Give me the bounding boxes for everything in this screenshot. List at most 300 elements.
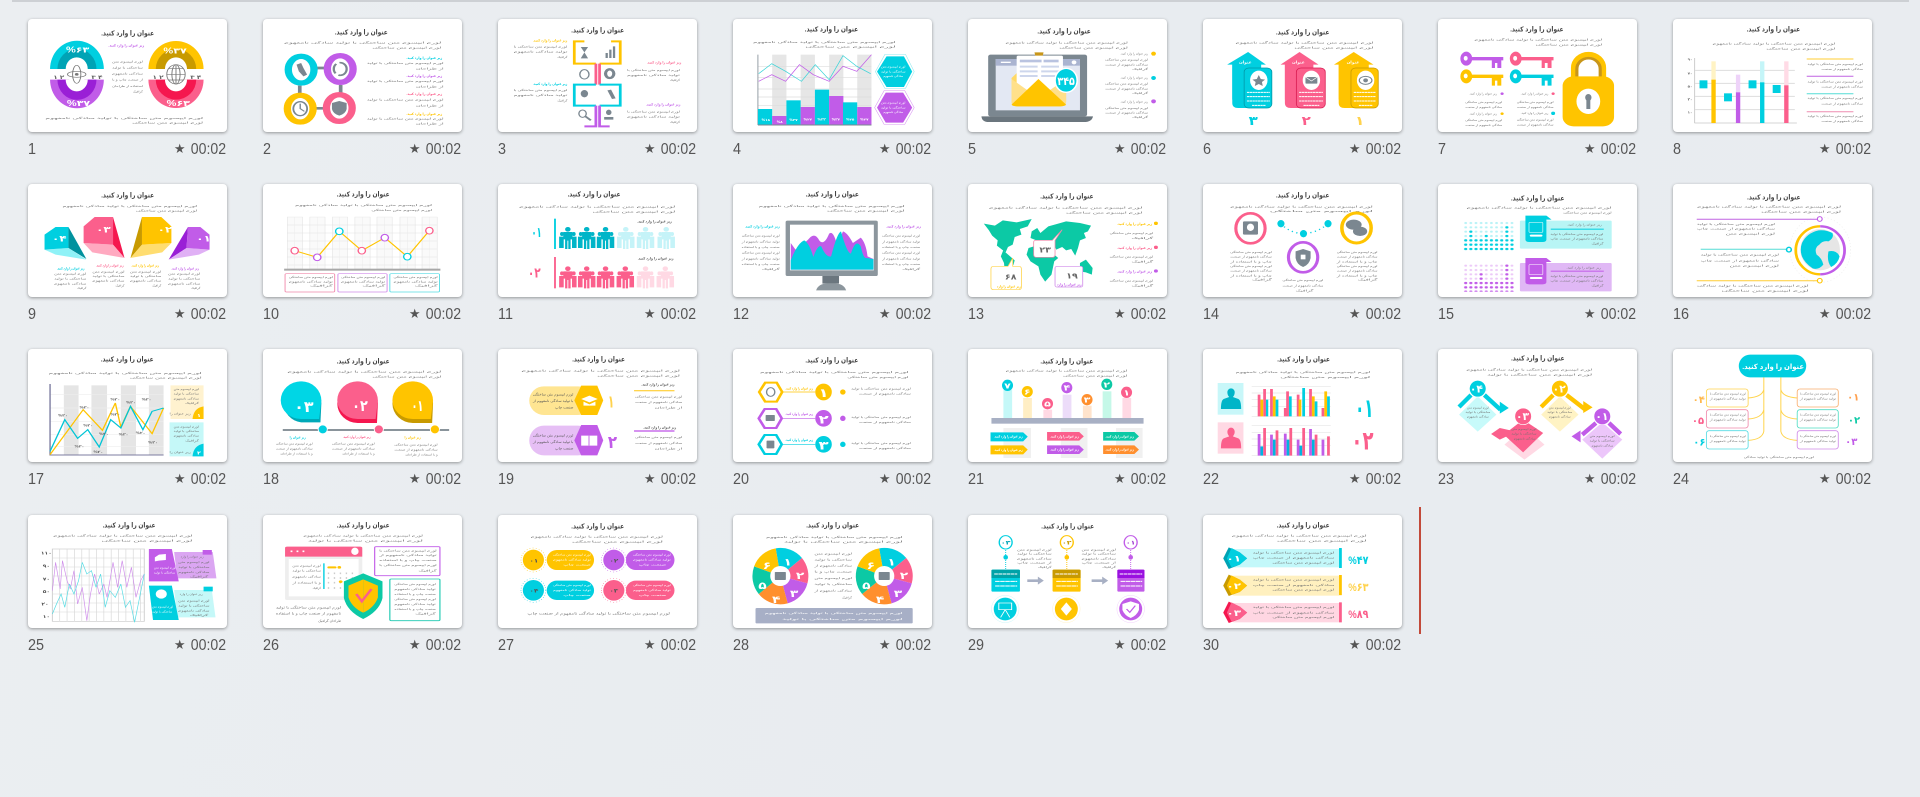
captions: لورم ایپسوم متن ساختگی xyxy=(394,443,437,447)
bottom text: لورم ایپسوم متن ساختگی با تولید سادگی نامفهوم xyxy=(45,117,203,121)
duration: 00:02 xyxy=(1836,306,1872,323)
cut gem shapes: ۰۱ xyxy=(196,235,210,244)
left text block: تولید سادگی نامفهوم از xyxy=(740,257,779,261)
slide 8 preview xyxy=(1672,19,1872,132)
slide 7 preview xyxy=(1438,19,1636,132)
row 2: زیر عنوان را وارد کنید. xyxy=(785,412,813,416)
row 2: ۲ xyxy=(818,414,828,427)
bottom text: طراحان گرافیک xyxy=(318,618,341,623)
left boxes: لورم ایپسوم متن ساختگی با xyxy=(1709,413,1746,418)
left donut chart: ۴ ۳ xyxy=(91,75,102,81)
right column text: چاپ و با استفاده از xyxy=(1334,260,1377,264)
title: عنوان را وارد کنید. xyxy=(805,356,858,365)
duration: 00:02 xyxy=(1131,637,1166,654)
purple note xyxy=(148,549,216,581)
tree connectors xyxy=(1748,378,1797,441)
slide number: 6 xyxy=(1202,141,1211,158)
cyan leader and text: سادگی نامفهوم از صنعت چاپ xyxy=(1700,259,1780,264)
bullet list: سادگی نامفهوم از صنعت xyxy=(1105,87,1148,92)
cyan leader and text: لورم ایپسوم متن xyxy=(1729,264,1779,269)
star icon: ★ xyxy=(1114,142,1126,157)
cut gem shapes: ۰۴ xyxy=(51,235,66,244)
right text list: زیر عنوان را وارد کنید. xyxy=(406,56,442,60)
intro text: لورم ایپسوم متن ساختگی با تولید سادگی نامفهوم xyxy=(988,206,1142,211)
star icon: ★ xyxy=(174,472,186,487)
left text block: زیر عنوان را وارد کنید. xyxy=(744,225,779,229)
left donut chart: ۲ ۱ xyxy=(53,75,64,81)
bullet list: گرافیک xyxy=(1132,92,1149,95)
intro text: لورم ایپسوم متن ساختگی با تولید سادگی نامفهوم xyxy=(303,534,422,538)
row 03: ۰۳ xyxy=(1226,609,1241,618)
intro text: لورم ایپسوم متن ساختگی با تولید سادگی نامفهوم xyxy=(760,371,908,375)
intro text xyxy=(303,534,422,543)
right text blocks: تولید سادگی نامفهوم xyxy=(627,74,680,78)
title: عنوان را وارد کنید. xyxy=(1276,521,1329,530)
slide 9 thumbnail xyxy=(26,183,229,323)
number 02: ۰۲ xyxy=(1351,426,1373,455)
slide number: 16 xyxy=(1672,306,1689,323)
centre text: ساختگی با تولید xyxy=(814,582,852,586)
legend list: لورم ایپسوم متن ساختگی xyxy=(1109,232,1153,236)
right boxes: تولید سادگی نامفهوم از xyxy=(1798,439,1836,444)
intro text xyxy=(1235,41,1373,51)
intro text: لورم ایپسوم متن ساختگی با تولید سادگی نامفهوم xyxy=(753,41,895,45)
intro text xyxy=(521,369,680,379)
line chart: %۳۰ xyxy=(83,424,93,428)
centre text: لورم ایپسوم متن xyxy=(814,576,852,580)
slide number: 10 xyxy=(262,306,279,323)
left segmented wheel: ۶ xyxy=(762,560,771,571)
key legends: لورم ایپسوم متن ساختگی xyxy=(1516,101,1553,105)
key legends: سادگی نامفهوم از صنعت xyxy=(1516,106,1554,110)
right segmented wheel xyxy=(855,548,912,605)
timeline xyxy=(282,425,449,434)
centre text: گرافیک xyxy=(841,596,852,599)
intro text: لورم ایپسوم متن ساختگی با تولید سادگی نامفهوم xyxy=(1235,41,1373,46)
line chart: %۳۰ xyxy=(79,405,89,409)
duration: 00:02 xyxy=(661,471,696,488)
slide 6 preview xyxy=(1202,19,1402,132)
cyan hexagon note: ساختگی با تولید xyxy=(880,70,906,74)
pillar chart: ۶ xyxy=(1023,388,1030,397)
captions: و با استفاده از طراحان xyxy=(280,452,313,456)
title pill: عنوان را وارد کنید. xyxy=(1742,362,1804,371)
slide 18 preview xyxy=(262,349,462,462)
yellow arrow card: ۱ xyxy=(1355,113,1364,128)
right text blocks xyxy=(634,383,682,451)
right text block: صنعت چاپ و با استفاده xyxy=(882,246,920,249)
people row 02 xyxy=(527,257,674,289)
right column text: گرافیک xyxy=(1357,278,1378,282)
duration: 00:02 xyxy=(191,637,226,654)
yellow pill with hexagon: لورم ایپسوم متن ساختگی xyxy=(532,392,573,396)
centre text: سادگی نامفهوم از xyxy=(812,589,852,593)
cyan note: ساختگی با تولید xyxy=(173,430,199,433)
centre text: لورم ایپسوم متن xyxy=(814,552,852,556)
row 1 xyxy=(759,383,911,402)
purple info panel: لورم ایپسوم متن ساختگی با تولید xyxy=(1550,275,1603,279)
slide number: 7 xyxy=(1438,141,1446,158)
slide 29 preview xyxy=(968,515,1166,628)
purple leader and text: لورم ایپسوم متن xyxy=(1725,232,1775,237)
captions: سادگی نامفهوم از صنعت xyxy=(331,447,375,452)
captions: سادگی نامفهوم xyxy=(54,282,86,287)
slide 25 thumbnail xyxy=(26,514,229,654)
intro text: لورم ایپسوم متن ساختگی با تولید سادگی نامفهوم xyxy=(1231,534,1366,538)
right text blocks xyxy=(627,61,681,124)
right text blocks: لورم ایپسوم متن ساختگی xyxy=(634,436,682,440)
wave chart: ۵۰ xyxy=(42,589,50,594)
teal text box: تولید سادگی نامفهوم xyxy=(394,587,435,591)
right segmented wheel: ۴ xyxy=(875,594,884,605)
slide 25 preview xyxy=(28,515,226,628)
row 02 xyxy=(1223,574,1368,596)
people row 02: ۰۲ xyxy=(527,265,541,281)
line chart: %۳۰ xyxy=(126,400,135,404)
intro text: لورم ایپسوم متن ساختگی با تولید سادگی نامفهوم xyxy=(1466,368,1592,373)
step 04 cyan xyxy=(1459,381,1508,432)
purple note: گرافیک xyxy=(189,575,209,578)
duration: 00:02 xyxy=(191,306,226,323)
side texts: سادگی نامفهوم xyxy=(1081,557,1116,561)
purple dot matrix xyxy=(1463,264,1514,292)
legend list: گرافیک xyxy=(1131,260,1154,264)
slide 13 thumbnail xyxy=(966,183,1169,323)
row 2: لورم ایپسوم متن ساختگی با تولید xyxy=(851,416,910,420)
left text blocks: گرافیک xyxy=(557,99,567,102)
people row 01: ۰۱ xyxy=(531,225,541,241)
column chart: ۹۰ xyxy=(1687,58,1692,62)
right text block: لورم ایپسوم متن ساختگی xyxy=(882,234,920,239)
title: عنوان را وارد کنید. xyxy=(1511,355,1564,363)
row 3 xyxy=(758,435,911,454)
slide number: 1 xyxy=(28,141,36,158)
cyan leader and text xyxy=(1700,248,1791,269)
key legends: لورم ایپسوم متن ساختگی xyxy=(1465,119,1502,123)
captions: زیر عنوان را وارد کنید. xyxy=(56,266,84,270)
intro text: لورم ایپسوم متن ساختگی با تولید سادگی نامفهوم xyxy=(53,534,192,538)
purple note: لورم ایپسوم متن xyxy=(178,560,209,564)
slide 16 preview xyxy=(1672,184,1872,297)
left column text: چاپ و با استفاده از xyxy=(1228,260,1272,264)
slide 17 preview xyxy=(28,349,226,462)
centre text: ساختگی با تولید xyxy=(814,558,852,561)
right segmented wheel: ۲ xyxy=(899,570,908,581)
intro text xyxy=(1712,42,1835,51)
cut gem shapes: ۰۲ xyxy=(157,226,172,235)
slide number: 21 xyxy=(968,471,984,488)
yellow leader and text: لورم ایپسوم متن ساختگی xyxy=(1721,289,1808,294)
intro text: لورم ایپسوم متن ساختگی xyxy=(1766,47,1835,51)
cyan arrow card xyxy=(1227,52,1271,128)
purple info panel: زیر عنوان را وارد کنید. xyxy=(1566,266,1601,270)
intro text: لورم ایپسوم متن ساختگی با تولید سادگی نامفهوم xyxy=(287,370,441,375)
slide 30 thumbnail xyxy=(1201,514,1404,654)
title pill xyxy=(1738,355,1806,378)
right text list: لورم ایپسوم متن ساختگی با تولید xyxy=(366,98,443,103)
duration: 00:02 xyxy=(896,471,932,488)
left column text: سادگی نامفهوم از صنعت xyxy=(1230,255,1272,260)
slide number: 28 xyxy=(732,637,749,654)
intro text: لورم ایپسوم متن ساختگی xyxy=(1761,210,1841,214)
calendar window: گرافیک xyxy=(312,586,321,590)
purple info panel: گرافیک xyxy=(1591,284,1604,288)
star icon: ★ xyxy=(644,638,656,653)
captions: سادگی نامفهوم از صنعت xyxy=(394,448,438,452)
line chart: %۳۰ xyxy=(74,444,84,448)
bar and line chart: %۲۵ xyxy=(845,118,855,122)
map callouts: ۶۸ xyxy=(1004,273,1017,282)
purple leader and text: سادگی نامفهوم از صنعت چاپ xyxy=(1696,227,1776,232)
right text list: لورم ایپسوم متن ساختگی با تولید xyxy=(366,117,443,122)
cyan hexagon note: سادگی نامفهوم xyxy=(883,75,903,79)
side texts: ساختگی با تولید xyxy=(1081,552,1116,555)
slide number: 13 xyxy=(968,306,984,323)
cyan note: سادگی نامفهوم xyxy=(173,434,199,439)
bullet list: لورم ایپسوم متن ساختگی xyxy=(1105,107,1148,111)
bracket diagram xyxy=(574,42,620,127)
purple pill with hexagon: با تولید سادگی نامفهوم از xyxy=(531,440,573,444)
left boxes: لورم ایپسوم متن ساختگی با xyxy=(1709,434,1746,439)
title: عنوان را وارد کنید. xyxy=(1041,522,1094,531)
intro text xyxy=(1235,371,1370,380)
pill texts: تولید سادگی نامفهوم xyxy=(633,588,670,592)
side texts: لورم ایپسوم متن xyxy=(1017,548,1051,552)
pill texts: صنعت چاپ xyxy=(563,593,591,597)
slide number: 3 xyxy=(498,141,506,158)
key legends: زیر عنوان را وارد کنید. xyxy=(1469,92,1497,96)
cyan note xyxy=(169,423,203,457)
step 03 pink: لورم ایپسوم متن xyxy=(1511,428,1536,432)
subtitle and centre text: لورم ایپسوم متن xyxy=(112,60,142,64)
cyan dot matrix xyxy=(1463,221,1514,251)
row 1: لورم ایپسوم متن ساختگی با تولید xyxy=(851,387,910,392)
purple text box: لورم ایپسوم متن ساختگی با xyxy=(379,563,436,567)
subtitle and centre text: گرافیک xyxy=(132,90,143,94)
intro text: لورم ایپسوم متن ساختگی xyxy=(1269,210,1373,214)
step 02 column xyxy=(1052,535,1080,622)
purple info panel xyxy=(1519,258,1611,292)
intro text: لورم ایپسوم متن ساختگی با تولید سادگی نامفهوم xyxy=(519,205,675,209)
yellow pill with hexagon: با تولید سادگی نامفهوم از xyxy=(531,399,573,403)
intro text: لورم ایپسوم متن ساختگی xyxy=(1063,374,1127,379)
wave chart xyxy=(40,549,144,622)
bottom text: لورم ایپسوم متن ساختگی با تولید xyxy=(275,605,341,609)
left boxes: تولید سادگی نامفهوم از xyxy=(1708,397,1746,402)
key legends: سادگی نامفهوم از صنعت xyxy=(1516,123,1554,128)
four pill cards: ۰۳ xyxy=(609,588,618,594)
cyan note: ساختگی با تولید xyxy=(178,604,209,607)
intro text: لورم ایپسوم متن ساختگی xyxy=(827,209,904,214)
left text block: صنعت چاپ و با استفاده xyxy=(741,263,780,266)
step 01 purple: ساختگی با تولید xyxy=(1589,439,1614,443)
intro text xyxy=(62,205,197,214)
step numbers: ۰۵ xyxy=(1691,416,1704,427)
teardrop numbers xyxy=(280,382,433,423)
left segmented wheel: ۱ xyxy=(783,556,791,568)
cyan leader and text: لورم ایپسوم متن ساختگی با تولید xyxy=(1700,253,1779,258)
pink arrow card: ۲ xyxy=(1301,113,1311,128)
right text blocks: زیر عنوان را وارد کنید. xyxy=(646,61,681,65)
right donut chart: %۶۳ xyxy=(166,100,190,109)
purple pill with hexagon xyxy=(529,425,617,456)
left text block: صنعت چاپ و با استفاده xyxy=(741,246,780,249)
intro text: لورم ایپسوم متن ساختگی xyxy=(571,540,663,544)
star icon: ★ xyxy=(879,142,890,157)
slide 8 thumbnail xyxy=(1671,18,1874,158)
laptop with envelope xyxy=(981,53,1093,122)
slide number: 17 xyxy=(28,471,44,488)
step 04 cyan: ساختگی با تولید xyxy=(1465,410,1490,414)
three text boxes: تولید سادگی نامفهوم xyxy=(393,280,437,284)
wave chart: ۱۰ xyxy=(42,614,50,619)
arrow tag groups: زیر عنوان را وارد کنید. xyxy=(1050,434,1079,438)
duration: 00:02 xyxy=(1366,306,1402,323)
shield icon xyxy=(343,573,382,619)
captions xyxy=(275,435,438,456)
intro text xyxy=(760,371,908,380)
title: عنوان را وارد کنید. xyxy=(567,190,620,199)
slide 10 thumbnail xyxy=(261,183,464,323)
purple leader and text xyxy=(1696,217,1822,237)
step numbers: ۰۴ xyxy=(1692,395,1704,406)
slide 10 preview xyxy=(262,184,462,297)
teardrop numbers: ۰۲ xyxy=(352,397,368,415)
intro text xyxy=(519,205,675,214)
right text list: زیر عنوان را وارد کنید. xyxy=(406,92,442,96)
arrow tag groups: زیر عنوان را وارد کنید. xyxy=(1105,448,1134,452)
pillar chart: ۱ xyxy=(1123,389,1129,398)
yellow pill with hexagon xyxy=(529,386,614,415)
title: عنوان را وارد کنید. xyxy=(1037,28,1090,36)
intro text xyxy=(1697,205,1841,214)
row 1: سادگی نامفهوم از صنعت xyxy=(858,392,911,397)
calendar window: سادگی نامفهوم xyxy=(292,575,321,579)
step 01 purple xyxy=(1571,408,1622,459)
legend list: لورم ایپسوم متن ساختگی xyxy=(1109,279,1153,284)
step 02 yellow: لورم ایپسوم متن xyxy=(1548,407,1570,411)
cyan avatar card xyxy=(1217,383,1243,415)
slide number: 22 xyxy=(1202,471,1219,488)
bullet list: گرافیک xyxy=(1132,68,1149,71)
pillar chart xyxy=(991,379,1143,424)
right text blocks: لورم ایپسوم متن ساختگی با xyxy=(627,110,680,115)
intro text: لورم ایپسوم متن ساختگی xyxy=(805,45,895,50)
bullet list: زیر عنوان را وارد کنید. xyxy=(1120,100,1148,104)
captions: زیر عنوان را وارد کنید. xyxy=(342,435,370,439)
yellow note: لورم ایپسوم متن xyxy=(173,388,198,392)
flow arrows xyxy=(1027,576,1108,584)
teal text box: لورم ایپسوم متن ساختگی xyxy=(394,597,435,601)
slide 14 thumbnail xyxy=(1201,183,1404,323)
left segmented wheel: ۳ xyxy=(789,588,799,599)
intro text: لورم ایپسوم متن ساختگی xyxy=(372,375,441,380)
column chart: ۷۰ xyxy=(1687,72,1692,76)
title: عنوان را وارد کنید. xyxy=(1510,26,1563,34)
right text list: لورم ایپسوم متن ساختگی با تولید xyxy=(366,62,443,66)
slide 30 preview xyxy=(1202,515,1402,628)
right text blocks: لورم ایپسوم متن ساختگی xyxy=(634,395,682,399)
intro text: لورم ایپسوم متن ساختگی xyxy=(1276,539,1366,543)
title: عنوان را وارد کنید. xyxy=(101,29,154,38)
slide 11 preview xyxy=(498,184,696,297)
centre column text xyxy=(1282,279,1324,293)
captions: لورم ایپسوم متن xyxy=(92,270,124,274)
slide 27 thumbnail xyxy=(496,514,699,654)
right donut chart: ۴ ۳ xyxy=(190,75,201,81)
left donut chart: %۳۷ xyxy=(66,100,90,109)
right donut chart: %۳۷ xyxy=(163,47,186,56)
slide 24 preview xyxy=(1672,349,1872,462)
column chart: ۵۰ xyxy=(1687,85,1692,89)
cut gem shapes xyxy=(44,217,210,260)
line chart xyxy=(50,384,163,456)
slide 14 preview xyxy=(1202,184,1402,297)
row 03: سادگی نامفهوم از صنعت چاپ xyxy=(1252,611,1335,615)
cyan info panel xyxy=(1519,216,1611,249)
slide 22 thumbnail xyxy=(1201,348,1404,488)
right text block: صنعت چاپ و با استفاده xyxy=(882,263,920,266)
four pill cards: ۰۲ xyxy=(609,558,618,564)
subtitle and centre text: از صنعت چاپ و با xyxy=(112,78,143,81)
row 3: لورم ایپسوم متن ساختگی با تولید xyxy=(851,442,910,446)
top toolbar shadow xyxy=(12,0,1909,2)
row 02: لورم ایپسوم متن ساختگی با تولید xyxy=(1252,578,1334,582)
intro text: لورم ایپسوم متن ساختگی با تولید سادگی نامفهوم xyxy=(295,204,432,208)
right text block: لورم ایپسوم متن ساختگی xyxy=(882,251,920,256)
slide 5 preview xyxy=(968,19,1166,132)
bar and line chart: %۸ xyxy=(776,121,783,124)
pill texts xyxy=(553,553,670,597)
centre column text: لورم ایپسوم متن ساختگی xyxy=(1282,279,1323,283)
bullet list: لورم ایپسوم متن ساختگی xyxy=(1105,58,1148,63)
slide number: 12 xyxy=(732,306,749,323)
star icon: ★ xyxy=(879,638,890,653)
star icon: ★ xyxy=(1584,142,1596,157)
centre text: سادگی نامفهوم از xyxy=(812,564,852,568)
right column text: سادگی نامفهوم از صنعت xyxy=(1336,255,1378,260)
right boxes: لورم ایپسوم متن ساختگی با xyxy=(1799,392,1836,397)
pill texts: صنعت چاپ xyxy=(638,563,666,566)
legend list: گرافیک xyxy=(1131,284,1154,288)
right text block: زیر عنوان را وارد کنید. xyxy=(886,225,920,229)
intro text xyxy=(287,370,441,380)
left segmented wheel xyxy=(752,548,808,605)
people row 02: زیر عنوان را وارد کنید. xyxy=(637,257,674,261)
duration: 00:02 xyxy=(896,141,932,158)
captions: سادگی نامفهوم xyxy=(168,282,200,287)
bar and line chart: %۳۲ xyxy=(831,118,840,122)
legend lines: سادگی نامفهوم از صنعت xyxy=(1821,102,1863,107)
cyan note: لورم ایپسوم متن xyxy=(173,425,198,429)
duration: 00:02 xyxy=(426,306,462,323)
three text boxes xyxy=(285,274,439,292)
bottom line: لورم ایپسوم متن ساختگی با تولید سادگی نامفهوم از صنعت چاپ xyxy=(527,611,669,615)
yellow note: سادگی نامفهوم xyxy=(173,397,199,401)
people row 01: زیر عنوان را وارد کنید. xyxy=(637,220,672,224)
step 01 column xyxy=(1116,535,1144,622)
title: عنوان را وارد کنید. xyxy=(1040,192,1093,200)
intro text: لورم ایپسوم متن ساختگی xyxy=(136,209,197,214)
slide number: 14 xyxy=(1202,306,1219,323)
slide number: 2 xyxy=(262,141,271,158)
intro text xyxy=(1231,534,1366,543)
wave chart: ۱۱۰ xyxy=(40,551,51,556)
right segmented wheel: ۶ xyxy=(866,560,875,571)
intro text: لورم ایپسوم متن ساختگی با تولید سادگی نامفهوم xyxy=(1230,205,1372,209)
right text blocks: زیر عنوان را وارد کنید. xyxy=(643,426,676,430)
row 01: لورم ایپسوم متن ساختگی با تولید xyxy=(1252,551,1334,555)
